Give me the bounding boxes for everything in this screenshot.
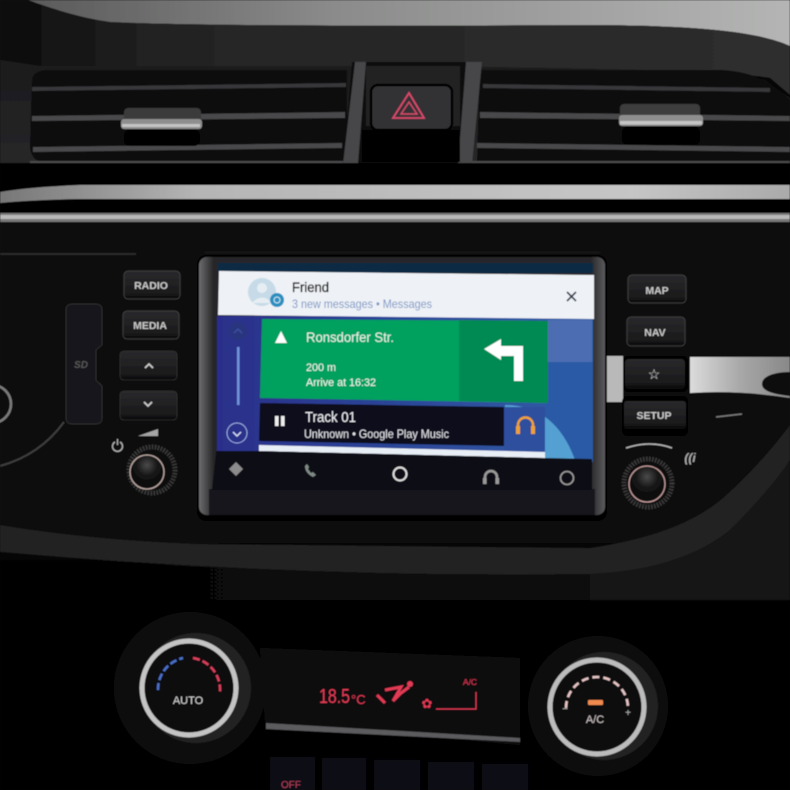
fan arc — [566, 677, 628, 708]
button: NAV — [627, 317, 685, 346]
temperature display: ✿ — [422, 696, 433, 711]
right climate dial — [528, 636, 668, 776]
icon: recents — [560, 472, 574, 484]
button: MAP: MAP — [645, 285, 669, 297]
chrome trim strip — [0, 163, 790, 223]
temperature display — [319, 677, 477, 711]
navigation card — [260, 319, 548, 403]
music card — [259, 403, 545, 458]
knob edge left — [0, 385, 11, 423]
hot arc — [193, 658, 220, 692]
tune knob — [620, 444, 696, 511]
vent slats left — [32, 83, 346, 152]
tune knob: ((i — [684, 451, 696, 465]
gloss reflection — [690, 357, 790, 398]
icon: pause — [275, 416, 284, 426]
notification bar — [218, 271, 594, 319]
side scroller — [227, 322, 247, 443]
street name: Ronsdorfer Str. — [306, 329, 394, 345]
volume knob — [112, 429, 178, 497]
button: RADIO — [124, 271, 180, 299]
temperature display: °C — [351, 692, 366, 707]
AUTO label: AUTO — [173, 695, 204, 707]
button: SETUP: SETUP — [636, 410, 672, 422]
right button column — [622, 275, 688, 436]
icon: power — [112, 439, 123, 451]
icon: directions — [229, 462, 243, 476]
left climate dial — [114, 612, 266, 764]
temperature display: A/C — [463, 677, 477, 687]
icon: headphones — [516, 418, 535, 434]
hazard switch — [343, 62, 482, 164]
button: NAV: NAV — [644, 327, 666, 339]
arrival time: Arrive at 16:32 — [306, 377, 376, 389]
notification subtitle: 3 new messages • Messages — [292, 297, 432, 311]
vent slats right — [477, 84, 790, 152]
icon: turn left arrow — [484, 339, 523, 381]
screen nav bar — [212, 451, 592, 490]
icon: nav pointer — [275, 331, 287, 343]
screen wallpaper — [217, 316, 593, 462]
button: MEDIA — [123, 311, 179, 339]
distance: 200 m — [306, 362, 336, 374]
right climate dial: − — [562, 704, 568, 715]
SD slot cover — [66, 304, 102, 424]
notification title: Friend — [292, 279, 329, 295]
vent tab right — [619, 104, 703, 126]
icon: phone — [305, 464, 316, 477]
climate panel — [0, 600, 790, 790]
lower gray band — [0, 425, 790, 575]
head unit panel — [0, 223, 790, 620]
icon: home circle — [394, 468, 406, 480]
lower climate buttons — [270, 757, 528, 790]
button: MEDIA: MEDIA — [133, 320, 167, 332]
button: MAP — [628, 275, 686, 303]
button: SETUP — [622, 396, 688, 436]
button: up — [120, 351, 177, 380]
icon: avatar — [248, 278, 284, 307]
temperature display: 18.5 — [319, 686, 350, 708]
right climate dial: + — [625, 708, 631, 719]
button: star: ☆ — [648, 366, 660, 382]
left curved edge — [0, 422, 64, 466]
vent tab left — [121, 108, 202, 129]
icon: close — [567, 292, 576, 301]
white peek card — [259, 445, 545, 458]
air vent surround — [0, 60, 790, 186]
icon: hazard triangle — [393, 93, 424, 118]
icon: headphones nav — [483, 471, 499, 484]
A/C label: A/C — [586, 714, 604, 726]
lower dark area — [0, 560, 790, 620]
A/C indicator — [588, 700, 603, 705]
cold arc — [158, 658, 183, 690]
screen bezel — [197, 255, 607, 521]
button: star — [623, 356, 688, 392]
upper dash surface — [0, 0, 790, 95]
SD slot cover: SD — [74, 360, 88, 371]
icon: volume wedge — [138, 429, 158, 436]
left button column — [120, 271, 180, 420]
track title: Track 01 — [305, 409, 356, 426]
button: RADIO: RADIO — [134, 280, 168, 292]
button: down — [120, 391, 177, 420]
track subtitle: Unknown • Google Play Music — [304, 427, 449, 441]
